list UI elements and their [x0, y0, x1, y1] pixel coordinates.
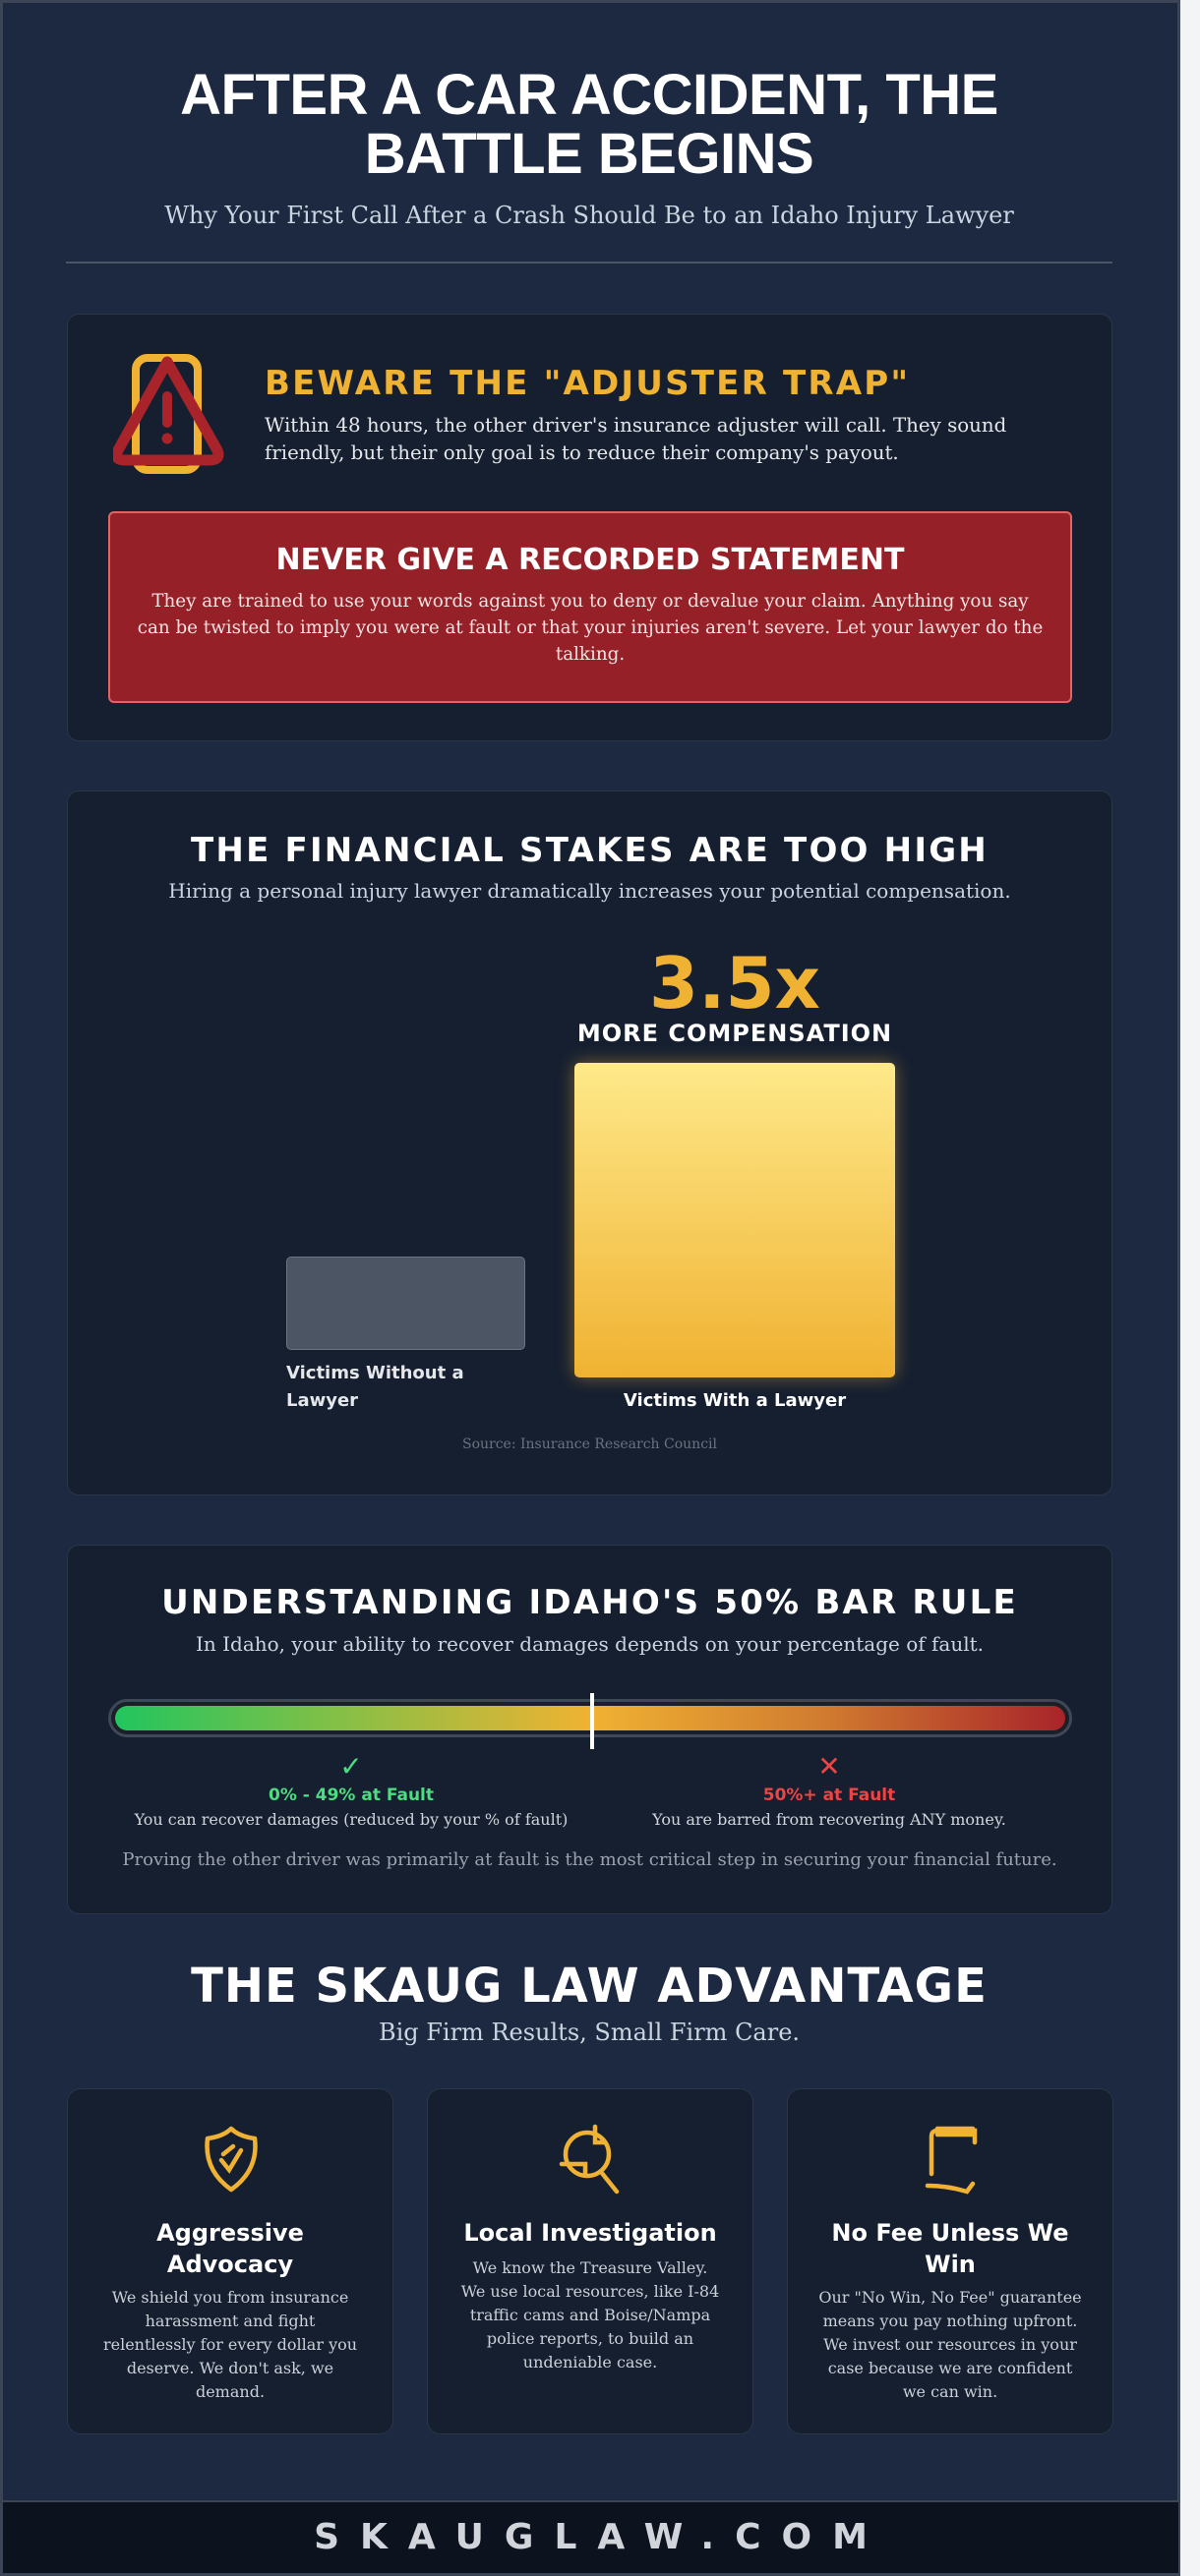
panel: 50% bar rule [67, 1545, 1112, 1914]
outcome: recover: 0% - 49% at Fault [269, 1786, 434, 1805]
bar: with lawyer [574, 1063, 895, 1377]
stat: 3.5x: 3.5x [649, 942, 820, 1025]
heading: UNDERSTANDING IDAHO'S 50% BAR RULE [161, 1583, 1018, 1622]
outcome: barred: 50%+ at Fault [763, 1786, 895, 1805]
footer: SKAUGLAW.COM [314, 2517, 888, 2557]
outcome: recover [134, 1750, 568, 1829]
stat label: MORE COMPENSATION [577, 1020, 892, 1047]
panel: financial stakes [67, 790, 1112, 1495]
icon: document [925, 2126, 978, 2195]
title: AFTER A CAR ACCIDENT, THE [180, 63, 998, 127]
callout: never give recorded statement [108, 511, 1072, 703]
subtitle: Why Your First Call After a Crash Should Be to an Idaho Injury Lawyer [164, 202, 1014, 229]
source: Source: Insurance Research Council [462, 1436, 717, 1452]
icon: phone warning [113, 354, 224, 474]
callout heading: NEVER GIVE A RECORDED STATEMENT [276, 543, 904, 577]
panel: adjuster trap [67, 314, 1112, 741]
card: no fee: No Fee Unless We Win [831, 2219, 1069, 2278]
card: aggressive advocacy [67, 2088, 393, 2434]
card: local investigation: Local Investigation [463, 2219, 717, 2247]
heading: skaug law advantage: THE SKAUG LAW ADVANTAGE [191, 1959, 988, 2014]
subtitle: In Idaho, your ability to recover damages depends on your percentage of fault. [196, 1632, 984, 1656]
outcome: barred [651, 1750, 1006, 1829]
subtitle: Hiring a personal injury lawyer dramatically increases your potential compensation. [168, 879, 1011, 903]
fault gauge [108, 1699, 1072, 1737]
outcome: barred: You are barred from recovering ANY money. [652, 1810, 1006, 1829]
card: local investigation [427, 2088, 753, 2434]
bar chart [286, 942, 907, 1411]
callout text: They are trained to use your words against you to deny or devalue your claim. Anything you say can be twisted to imply you were at fault or that your injuries aren't severe. Let your lawyer do the talking. [138, 591, 1043, 665]
card: no fee: Our "No Win, No Fee" guarantee means you pay nothing upfront. We invest our resources in your case because we are confident we can win. [818, 2288, 1082, 2401]
text block: Within 48 hours, the other driver's insurance adjuster will call. They sound friendly, but their only goal is to reduce their company's payout. [265, 414, 1006, 464]
footer [3, 2500, 1178, 2573]
label: without: Victims Without a Lawyer [286, 1363, 464, 1411]
heading: THE FINANCIAL STAKES ARE TOO HIGH [191, 831, 989, 870]
label: with: Victims With a Lawyer [624, 1390, 846, 1411]
card: aggressive advocacy: Aggressive Advocacy [156, 2219, 304, 2278]
subtitle: Big Firm Results, Small Firm Care. [379, 2019, 800, 2046]
icon: shield [205, 2126, 258, 2193]
title [180, 63, 998, 186]
bar: without lawyer [286, 1257, 525, 1350]
title: BATTLE BEGINS [365, 122, 813, 186]
card: aggressive advocacy: We shield you from insurance harassment and fight relentlessly for every dollar you deserve. We don't ask, we demand. [103, 2288, 357, 2401]
card: no fee [787, 2088, 1113, 2434]
note: Proving the other driver was primarily at fault is the most critical step in securing your financial future. [122, 1849, 1057, 1870]
marker [590, 1693, 594, 1749]
outcome: recover: You can recover damages (reduced by your % of fault) [135, 1810, 568, 1829]
heading: BEWARE THE "ADJUSTER TRAP" [265, 364, 910, 403]
icon: magnifier [559, 2124, 620, 2195]
outcome: barred: ✕ [817, 1750, 841, 1783]
card: local investigation: We know the Treasure Valley. We use local resources, like I-84 traffic cams and Boise/Nampa police reports, to build an undeniable case. [461, 2258, 719, 2371]
outcome: recover: ✓ [339, 1750, 363, 1783]
